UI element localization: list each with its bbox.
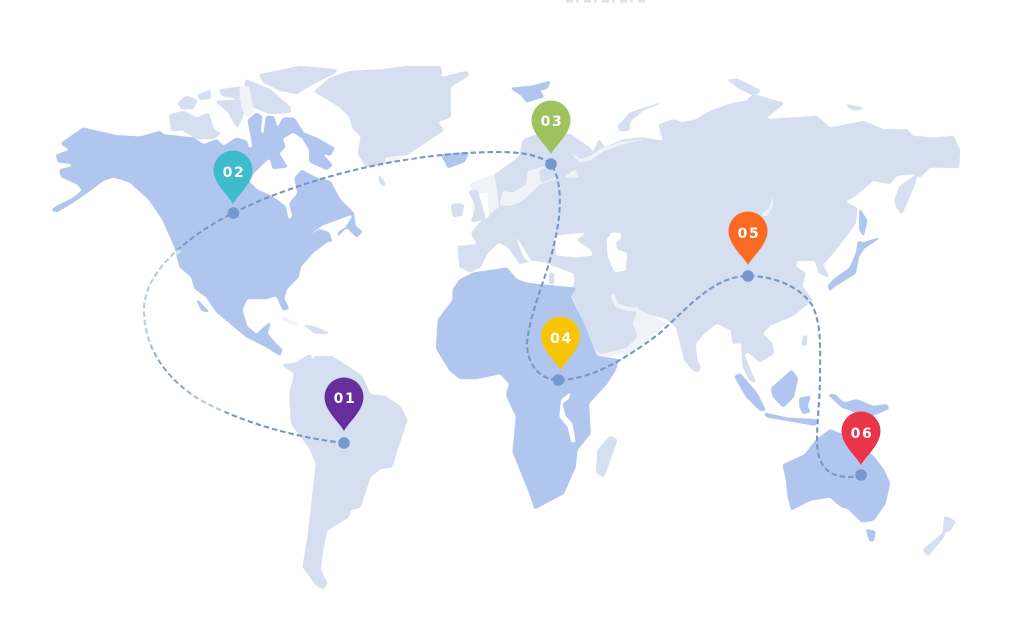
Svalbard bbox=[512, 82, 550, 102]
pin 02 bbox=[214, 150, 252, 204]
small islands bbox=[379, 176, 385, 186]
New Siberian Islands bbox=[847, 105, 863, 110]
Kamchatka bbox=[895, 175, 917, 213]
Arctic archipelago bbox=[170, 67, 337, 138]
Mediterranean islands bbox=[550, 273, 553, 284]
pin 05 bbox=[728, 212, 768, 265]
pin 03: 03 bbox=[541, 114, 563, 130]
North America landmass bbox=[52, 113, 362, 355]
Lake Baikal bbox=[762, 197, 773, 216]
Adriatic sea bbox=[517, 238, 533, 264]
Sulawesi bbox=[800, 397, 810, 413]
North America and Greenland bbox=[52, 67, 468, 355]
Caribbean islands bbox=[283, 317, 297, 325]
Severnaya Zemlya bbox=[728, 79, 760, 95]
Novaya Zemlya bbox=[618, 103, 660, 131]
Sakhalin bbox=[860, 210, 867, 235]
Eurasia landmass bbox=[458, 95, 959, 382]
New Guinea bbox=[829, 395, 888, 415]
pin 06 bbox=[842, 412, 880, 465]
African lakes bbox=[560, 393, 575, 442]
route stop dots bbox=[228, 158, 867, 481]
Australia and Southeast Asia bbox=[735, 336, 955, 555]
Madagascar bbox=[597, 437, 617, 477]
Philippines bbox=[803, 336, 807, 345]
Africa bbox=[437, 268, 618, 508]
Borneo bbox=[772, 371, 797, 407]
pale seas of Europe bbox=[452, 139, 643, 222]
Iceland bbox=[442, 153, 468, 167]
Red Sea and Arabian Sea haze bbox=[570, 296, 667, 358]
pin 01 bbox=[324, 378, 364, 431]
pin 06: 06 bbox=[851, 426, 873, 442]
world map bbox=[52, 67, 959, 588]
Sumatra bbox=[735, 374, 765, 410]
Japan bbox=[828, 238, 878, 290]
Greenland bbox=[315, 67, 468, 167]
dashed route bbox=[144, 152, 861, 477]
pin 03 bbox=[532, 100, 570, 154]
pin 01: 01 bbox=[334, 391, 356, 407]
pin 04 bbox=[541, 316, 580, 370]
Baja strait bbox=[196, 291, 215, 313]
New Zealand bbox=[923, 517, 955, 555]
Tasmania bbox=[867, 530, 875, 541]
Caspian Sea bbox=[607, 233, 627, 272]
Australia bbox=[783, 430, 889, 522]
Black Sea bbox=[555, 233, 592, 257]
Eurasia bbox=[452, 79, 959, 382]
South America bbox=[283, 355, 407, 588]
pin 04: 04 bbox=[550, 331, 573, 347]
Java bbox=[765, 413, 817, 425]
pin 02: 02 bbox=[223, 165, 245, 181]
pin 05: 05 bbox=[738, 226, 760, 242]
Gulf of St Lawrence bbox=[312, 216, 352, 242]
Africa and South America bbox=[283, 268, 618, 588]
